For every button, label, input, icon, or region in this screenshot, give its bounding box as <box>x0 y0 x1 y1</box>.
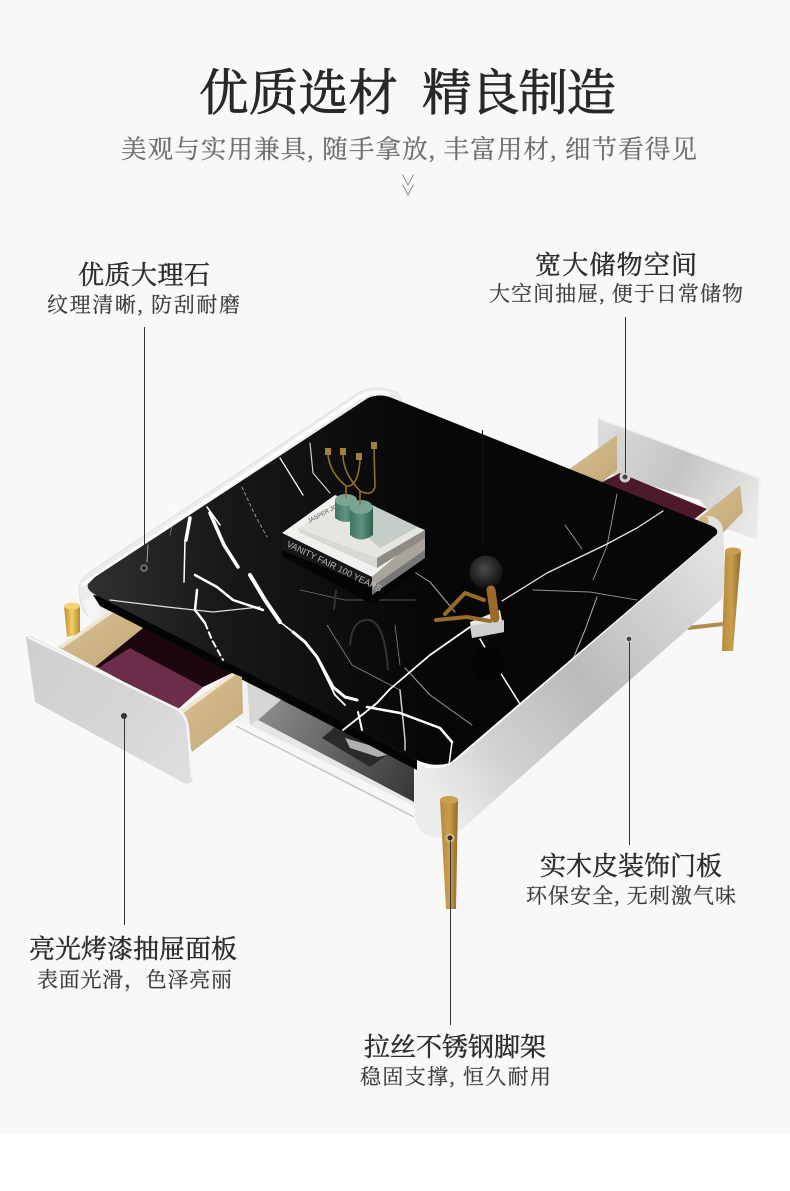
callout: storage <box>489 251 743 473</box>
callout: storage: 宽大储物空间 <box>535 251 697 280</box>
coffee table illustration <box>26 388 760 909</box>
front leg <box>440 796 458 909</box>
figurine on marble base <box>436 556 504 638</box>
books: JASPER JOHNS <box>307 498 350 525</box>
books: VANITY FAIR 100 YEARS <box>285 539 383 594</box>
front right white door panel <box>415 516 724 838</box>
panel highlight edge <box>425 534 716 767</box>
markers <box>121 473 632 842</box>
icon: double chevron <box>402 174 414 195</box>
callout: steel legs <box>360 841 551 1089</box>
candle holder <box>325 442 377 540</box>
back right leg <box>687 548 741 651</box>
callout: storage: 大空间抽屉, 便于日常储物 <box>489 282 743 306</box>
lower shelf and base <box>233 678 420 817</box>
callout: veneer door: 实木皮装饰门板 <box>540 852 722 881</box>
right drawer <box>568 418 760 540</box>
callout: drawer panel: 表面光滑，色泽亮丽 <box>37 968 232 993</box>
subtitle: 美观与实用兼具, 随手拿放, 丰富用材, 细节看得见 <box>121 135 697 164</box>
callout: drawer panel <box>29 719 237 993</box>
back left leg <box>64 602 80 637</box>
title <box>199 66 616 121</box>
title: 精良制造 <box>422 66 616 121</box>
left drawer <box>26 611 243 783</box>
reflection <box>334 590 388 670</box>
black marble top <box>88 396 717 770</box>
callout: steel legs: 拉丝不锈钢脚架 <box>364 1033 546 1062</box>
table body white rim <box>79 388 402 640</box>
title: 优质选材 <box>199 66 398 121</box>
callout: steel legs: 稳固支撑, 恒久耐用 <box>360 1065 551 1089</box>
callout: marble: 纹理清晰, 防刮耐磨 <box>47 293 240 317</box>
books <box>282 495 425 605</box>
callout: veneer door: 环保安全, 无刺激气味 <box>526 884 736 908</box>
callout: drawer panel: 亮光烤漆抽屉面板 <box>29 935 237 964</box>
callout: marble <box>47 261 240 545</box>
callout: veneer door <box>526 642 736 908</box>
callout: marble: 优质大理石 <box>78 261 210 290</box>
marble veins <box>110 443 663 765</box>
